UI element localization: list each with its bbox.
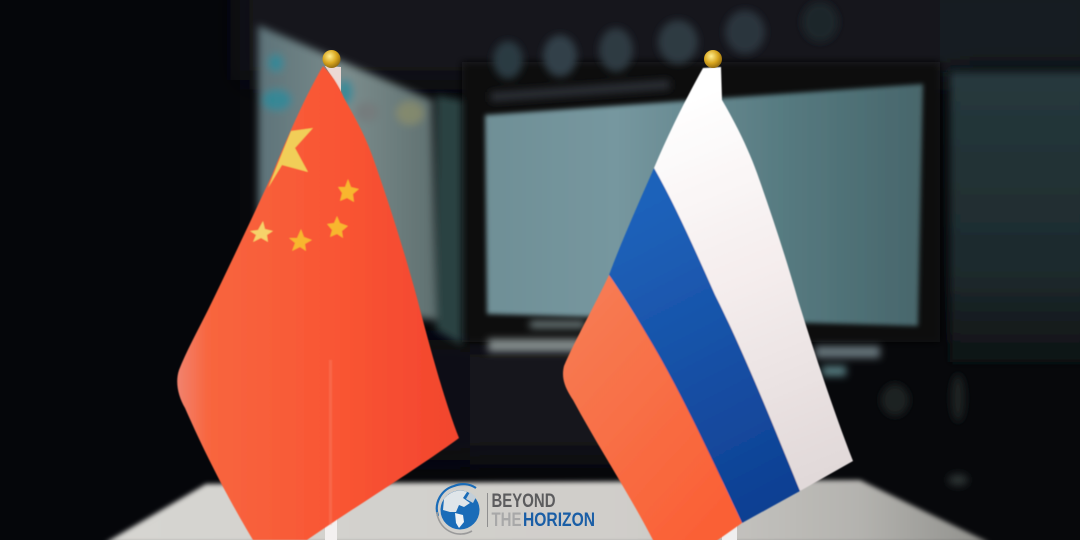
logo wordmark: BEYOND	[492, 491, 556, 512]
table	[105, 480, 990, 540]
small star 2	[327, 216, 348, 238]
China flag	[177, 66, 459, 540]
pole right	[722, 526, 737, 540]
small star 4	[250, 221, 273, 242]
logo wordmark	[492, 491, 595, 531]
logo wordmark: THE	[492, 510, 522, 531]
big star	[268, 128, 313, 188]
red stripe	[563, 275, 742, 540]
logo: Beyond the Horizon	[437, 484, 595, 534]
blue stripe	[609, 168, 800, 523]
wall screen	[485, 84, 923, 326]
pole left	[325, 66, 341, 540]
logo wordmark: HORIZON	[523, 510, 595, 531]
small star 1	[338, 179, 359, 202]
Russia flag	[563, 67, 853, 540]
wall map	[258, 25, 462, 345]
screen shelf and dials	[488, 2, 968, 486]
crease	[329, 360, 332, 525]
white stripe	[654, 67, 853, 491]
side wall panel	[462, 62, 1080, 362]
divider	[487, 493, 488, 527]
icon: globe	[437, 484, 480, 534]
gold finial left	[322, 50, 340, 68]
small star 3	[289, 229, 312, 251]
gold finial right	[704, 50, 722, 68]
